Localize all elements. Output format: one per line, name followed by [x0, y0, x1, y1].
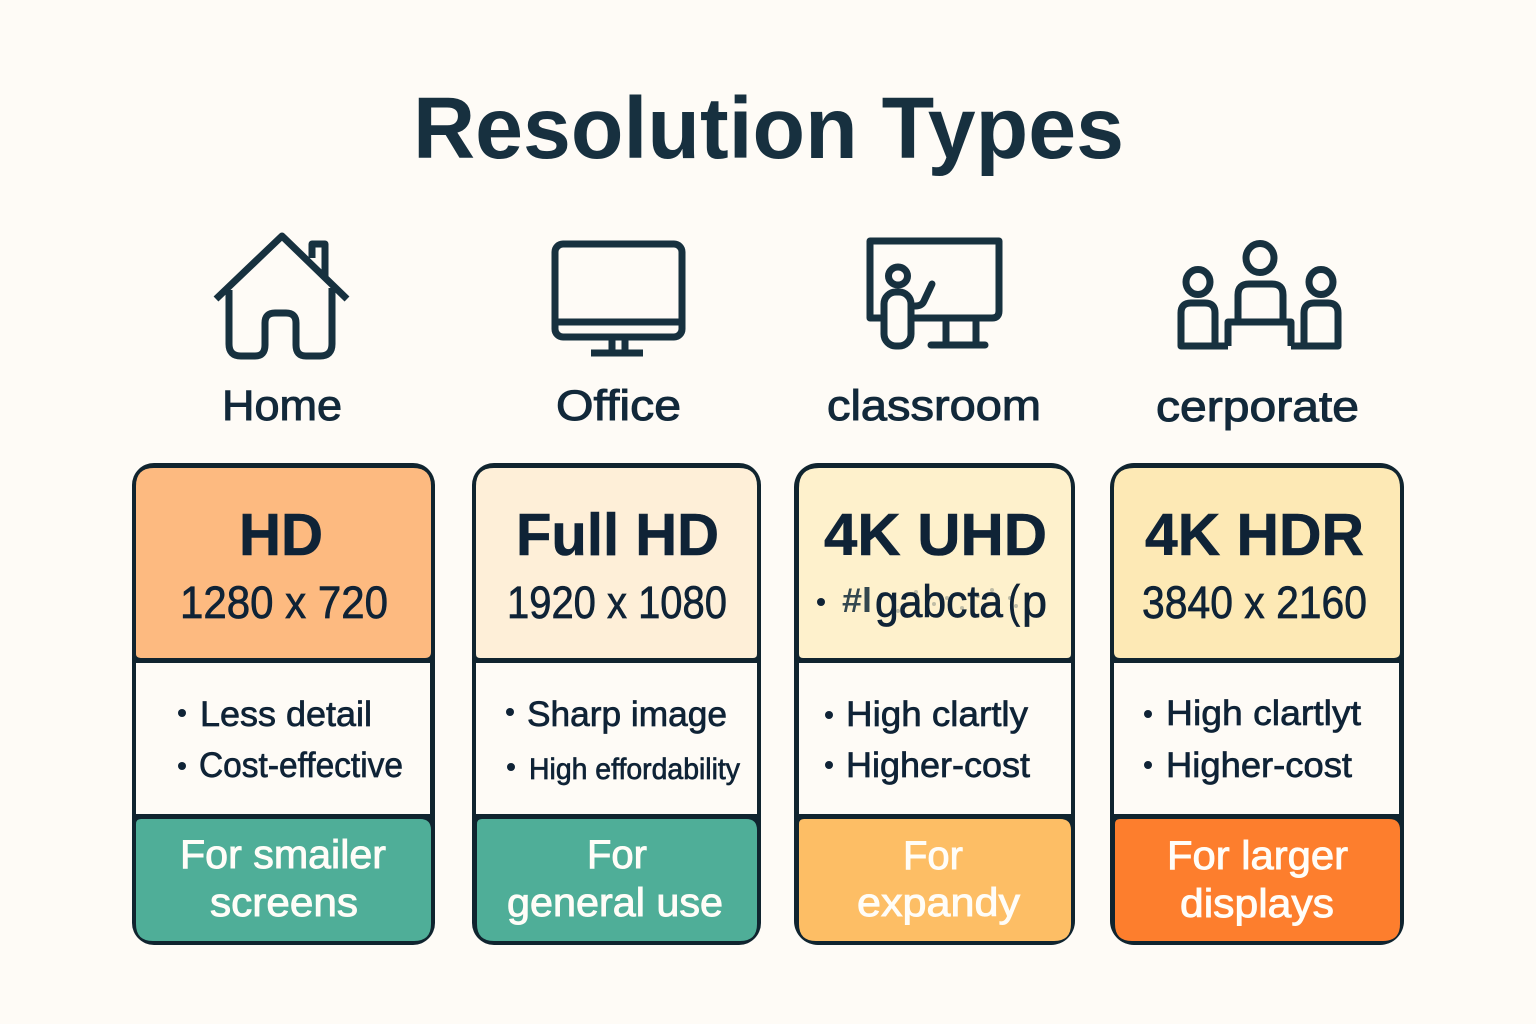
use: For larger displays — [1167, 834, 1348, 926]
footer: 4K UHD — [799, 819, 1071, 941]
garbled resolution text: #l — [842, 582, 872, 620]
footer: 4K HDR — [1115, 819, 1400, 941]
garbled resolution text: p — [1022, 576, 1047, 627]
header: Full HD — [476, 468, 757, 658]
header: HD — [136, 468, 431, 658]
use: For larger displays: displays — [1180, 882, 1334, 926]
use: For smaller screens: For smailer — [180, 833, 386, 877]
title: Resolution Types — [413, 80, 1124, 177]
icon: office monitor — [555, 244, 682, 353]
use: For larger displays: For larger — [1167, 834, 1348, 878]
icon: classroom teacher at board — [870, 241, 999, 346]
use: For general use: general use — [507, 881, 723, 925]
garbled resolution text: ( — [1008, 576, 1020, 627]
icon: corporate team — [1181, 244, 1338, 346]
body: 4K HDR — [1114, 663, 1399, 814]
body: 4K UHD — [799, 663, 1071, 814]
name: Full HD: Full HD — [516, 502, 719, 568]
garbled resolution text — [817, 576, 1047, 627]
footer: HD — [136, 819, 431, 941]
name: 4K UHD: 4K UHD — [824, 502, 1047, 568]
use: For general use — [507, 833, 723, 925]
bullet: High clartlyt: High clartlyt — [1166, 694, 1361, 733]
resolution: 1920 x 1080: 1920 x 1080 — [507, 577, 727, 628]
label: cerporate: cerporate — [1156, 383, 1359, 431]
bullet: Higher-cost: Higher-cost — [1166, 746, 1352, 785]
label: classroom: classroom — [827, 382, 1041, 430]
body: Full HD — [476, 663, 757, 814]
resolution: 1280 x 720: 1280 x 720 — [180, 577, 388, 628]
name: HD: HD — [239, 502, 323, 568]
garbled resolution text: gabcta — [875, 576, 1004, 627]
label: Home: Home — [222, 382, 342, 430]
bullet: High clartly: High clartly — [846, 695, 1029, 734]
panel: HD card — [132, 463, 435, 945]
bullet: High effordability: High effordability — [529, 753, 740, 786]
body: HD — [136, 663, 430, 814]
name: 4K HDR: 4K HDR — [1145, 502, 1364, 568]
resolution: 3840 x 2160: 3840 x 2160 — [1142, 577, 1367, 628]
bullet: Sharp image: Sharp image — [527, 695, 727, 734]
use: For expandy: For — [903, 834, 963, 878]
bullet: Higher-cost: Higher-cost — [846, 746, 1030, 785]
panel: 4K UHD card — [794, 463, 1075, 945]
use: For expandy: expandy — [857, 881, 1020, 925]
bullet: Cost-effective: Cost-effective — [199, 746, 403, 785]
panel: 4K HDR card — [1110, 463, 1404, 945]
use: For smaller screens — [180, 833, 386, 925]
panel: Full HD card — [472, 463, 761, 945]
label: Office: Office — [556, 382, 681, 430]
bullet: Less detail: Less detail — [200, 695, 372, 734]
header: 4K HDR — [1114, 468, 1400, 658]
footer: Full HD — [477, 819, 757, 941]
use: For general use: For — [587, 833, 647, 877]
header: 4K UHD — [799, 468, 1071, 658]
use: For smaller screens: screens — [210, 881, 358, 925]
icon: house — [216, 236, 347, 356]
use: For expandy — [857, 834, 1020, 925]
